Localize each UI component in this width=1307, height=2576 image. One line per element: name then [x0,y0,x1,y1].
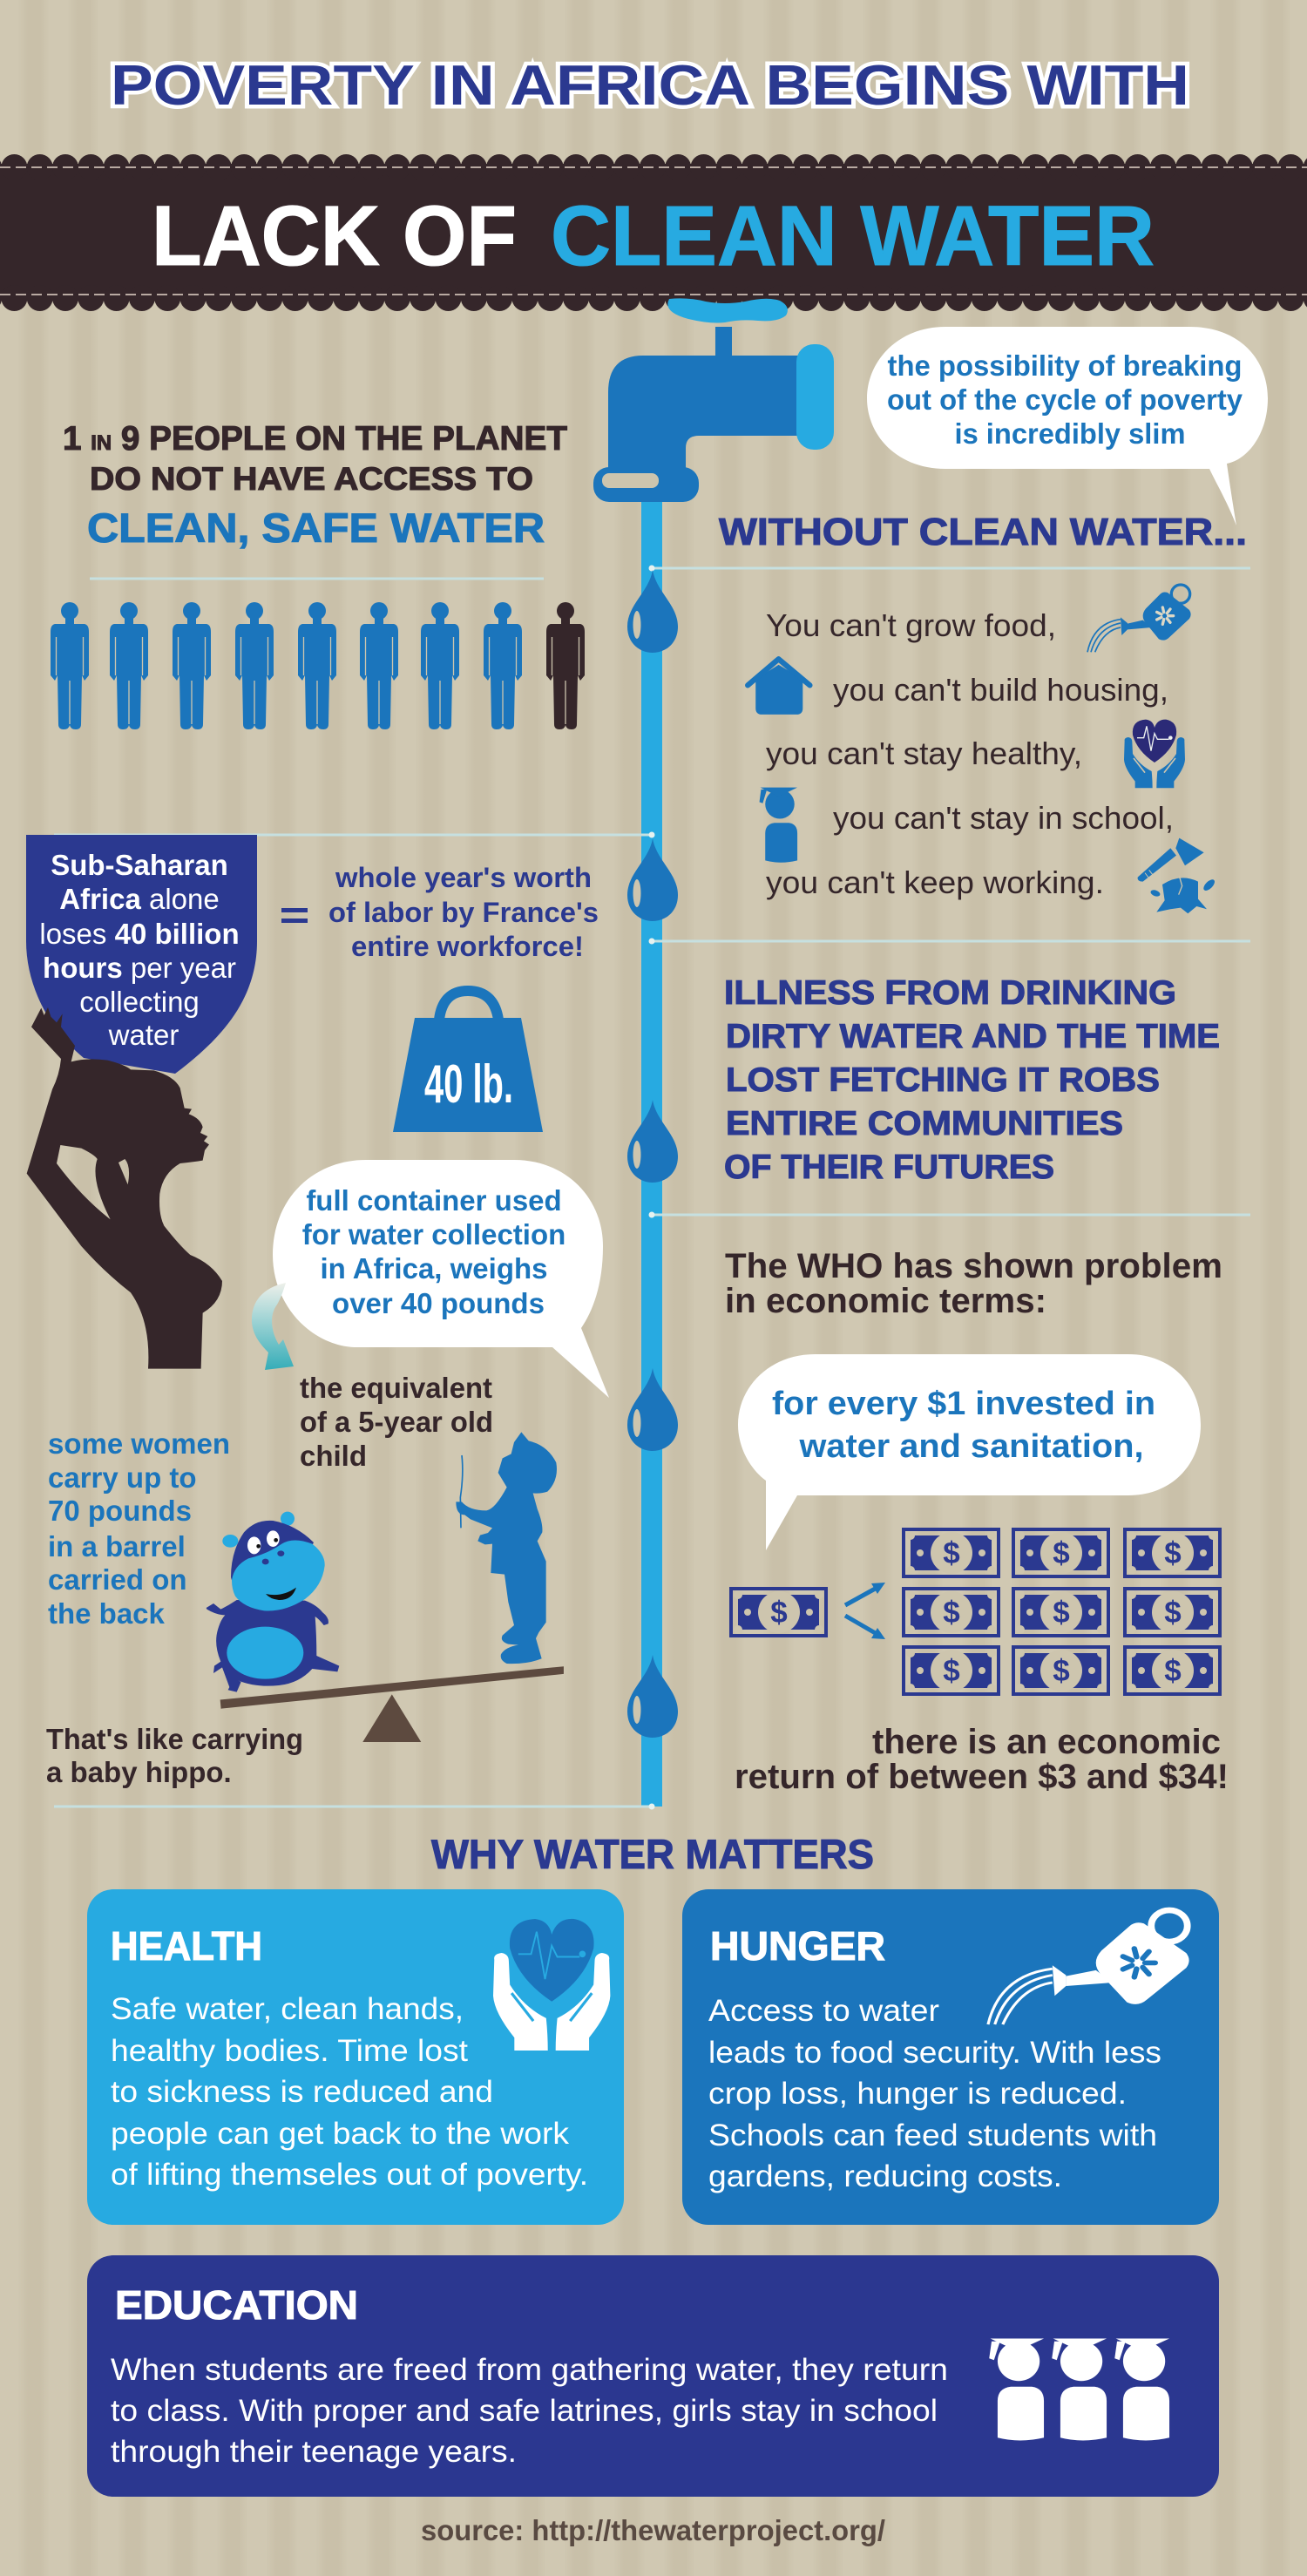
text: baby hippo: That's like carrying [46,1723,303,1755]
text: sub-saharan africa loses 40 billion hours: water [108,1019,179,1051]
panel: health: of lifting themseles out of poverty. [111,2158,588,2192]
panel: health [87,1889,624,2225]
callout: possibility of breaking out: out of the cycle of poverty [887,383,1243,416]
text: some women carry: 70 pounds [48,1495,192,1527]
text: equivalent of a 5-year old child: of a 5-year old [300,1406,493,1438]
panel: health: healthy bodies. Time lost [111,2034,468,2068]
text: some women carry: carry up to [48,1461,197,1494]
heading: 1 in 9 people [63,420,567,551]
panel: hunger: leads to food security. With less [708,2036,1161,2070]
equals sign [281,908,308,923]
text block: you can't list: you can't keep working. [766,864,1104,900]
panel: hunger: Schools can feed students with [708,2118,1157,2152]
icon: one dollar bill [731,1589,826,1636]
panel: health: Safe water, clean hands, [111,1992,464,2026]
banner: lack of clean water: LACK OF [152,188,517,283]
panel: hunger: gardens, reducing costs. [708,2159,1062,2193]
heading: without clean water: WITHOUT CLEAN WATER... [719,511,1247,553]
icon: grid of nine dollar bills: $ [1164,1536,1182,1570]
text: baby hippo [46,1723,303,1788]
panel: health: to sickness is reduced and [111,2075,493,2109]
shield: sub-saharan africa [26,835,257,1074]
heading: 1 in 9 people: DO NOT HAVE ACCESS TO [90,461,533,497]
panel: education: EDUCATION [115,2282,358,2328]
icon: faucet [593,298,834,502]
panel: health: people can get back to the work [111,2117,570,2151]
text: whole year's worth: of labor by France's [328,897,599,928]
text: some women carry [48,1427,230,1630]
text: economic return: there is an economic [872,1723,1221,1761]
panel: illness text: DIRTY WATER AND THE TIME [726,1018,1220,1055]
text: sub-saharan africa loses 40 billion hours: loses 40 billion [39,918,240,950]
panel: hunger: HUNGER [710,1923,885,1969]
icon: grid of nine dollar bills [904,1529,1220,1694]
callout: full container: full container used [306,1184,562,1217]
icon: grid of nine dollar bills: $ [1164,1596,1182,1630]
icon: one dollar bill: $ [770,1596,788,1630]
text block: you can't list: You can't grow food, [766,607,1056,643]
text: economic return: return of between $3 and $34! [735,1758,1229,1796]
callout: full container [273,1160,609,1398]
panel: illness text: OF THEIR FUTURES [724,1149,1054,1186]
illustration: hippo [207,1512,339,1692]
callout: full container: over 40 pounds [332,1287,545,1319]
panel: health: HEALTH [111,1923,262,1969]
text: some women carry: in a barrel [48,1530,186,1563]
panel: illness text: LOST FETCHING IT ROBS [726,1061,1160,1099]
text: whole year's worth: entire workforce! [351,931,584,962]
source line: source: http://thewaterproject.org/ [421,2514,885,2546]
icon: hands holding heart [1124,720,1185,788]
text block: you can't list: you can't build housing, [833,672,1168,708]
text: sub-saharan africa loses 40 billion hours: collecting [79,986,200,1018]
text: equivalent of a 5-year old child [300,1372,493,1472]
text: baby hippo: a baby hippo. [46,1756,232,1788]
icon: 40 lb weight: 40 lb. [424,1054,513,1115]
panel: hunger: crop loss, hunger is reduced. [708,2077,1127,2111]
text: some women carry: the back [48,1597,166,1630]
text: some women carry: carried on [48,1563,187,1596]
icons: three students white [989,2339,1169,2440]
arrow: curved down to equivalent [252,1283,294,1370]
callout: full container: in Africa, weighs [320,1252,548,1285]
icon: hands holding heart white [493,1919,610,2051]
icon: watering can white [988,1910,1189,2024]
illustration: child silhouette [456,1432,557,1664]
panel: education: to class. With proper and safe latrines, girls stay in school [111,2394,938,2428]
text: whole year's worth [328,862,599,962]
heading: why water matters: WHY WATER MATTERS [431,1831,874,1877]
text: sub-saharan africa loses 40 billion hours: Africa alone [59,883,220,915]
banner: lack of clean water: CLEAN WATER [551,188,1155,283]
icon: house [748,659,809,715]
text: equivalent of a 5-year old child: the equivalent [300,1372,492,1404]
panel: illness text [724,974,1220,1186]
text: WHO: in economic terms: [725,1282,1046,1320]
text: whole year's worth: whole year's worth [335,862,592,893]
icon: water drops along pipe [627,570,678,1738]
banner: lack of clean water [0,164,1307,301]
text: WHO [725,1247,1222,1320]
text: WHO: The WHO has shown problem [725,1247,1222,1285]
callout: possibility of breaking out: is incredibly slim [955,417,1185,450]
pictogram: 1 in 9 people [51,602,585,729]
panel: education: When students are freed from gathering water, they return [111,2353,948,2387]
panel: illness text: ENTIRE COMMUNITIES [726,1105,1123,1142]
icon: grid of nine dollar bills: $ [1164,1654,1182,1688]
callout: possibility of breaking out: the possibility of breaking [887,349,1243,382]
illustration: seesaw [220,1666,564,1742]
callout: possibility of breaking out [867,327,1268,525]
arrows: multiply [845,1583,885,1639]
text: sub-saharan africa loses 40 billion hours [39,849,240,1051]
icon: student [760,788,797,863]
panel: hunger [682,1889,1219,2225]
text block: you can't list [766,607,1174,900]
panel: education: through their teenage years. [111,2435,517,2469]
icon: grid of nine dollar bills: $ [1053,1596,1070,1630]
icon: 40 lb weight [393,991,543,1132]
callout: full container: for water collection [302,1218,565,1251]
icon: grid of nine dollar bills: $ [943,1536,960,1570]
heading: 1 in 9 people: 1 IN 9 PEOPLE ON THE PLANET [63,420,567,458]
icon: axe and stump [1138,838,1216,913]
icon: watering can [1087,585,1191,652]
text: economic return [735,1723,1229,1796]
callout: for every $1 invested: water and sanitation, [798,1428,1143,1465]
text block: you can't list: you can't stay healthy, [766,736,1082,771]
silhouette: woman [27,1007,222,1369]
icon: grid of nine dollar bills: $ [943,1596,960,1630]
panel: hunger: Access to water [708,1994,939,2028]
panel: education [87,2255,1219,2497]
panel: illness text: ILLNESS FROM DRINKING [724,974,1176,1012]
water pipe [641,497,662,1807]
heading: 1 in 9 people: CLEAN, SAFE WATER [87,505,545,551]
icon: grid of nine dollar bills: $ [1053,1654,1070,1688]
text: sub-saharan africa loses 40 billion hours: hours per year [43,952,236,984]
callout: for every $1 invested [738,1354,1201,1550]
divider lines with dots [54,565,1250,1809]
icon: grid of nine dollar bills: $ [943,1654,960,1688]
callout: for every $1 invested: for every $1 invested in [772,1386,1155,1422]
text: sub-saharan africa loses 40 billion hours: Sub-Saharan [51,849,228,881]
text: some women carry: some women [48,1427,230,1460]
text block: you can't list: you can't stay in school, [833,800,1174,836]
title: poverty in africa begins with: POVERTY IN AFRICA BEGINS WITH [111,53,1189,117]
text: equivalent of a 5-year old child: child [300,1440,367,1472]
icon: grid of nine dollar bills: $ [1053,1536,1070,1570]
